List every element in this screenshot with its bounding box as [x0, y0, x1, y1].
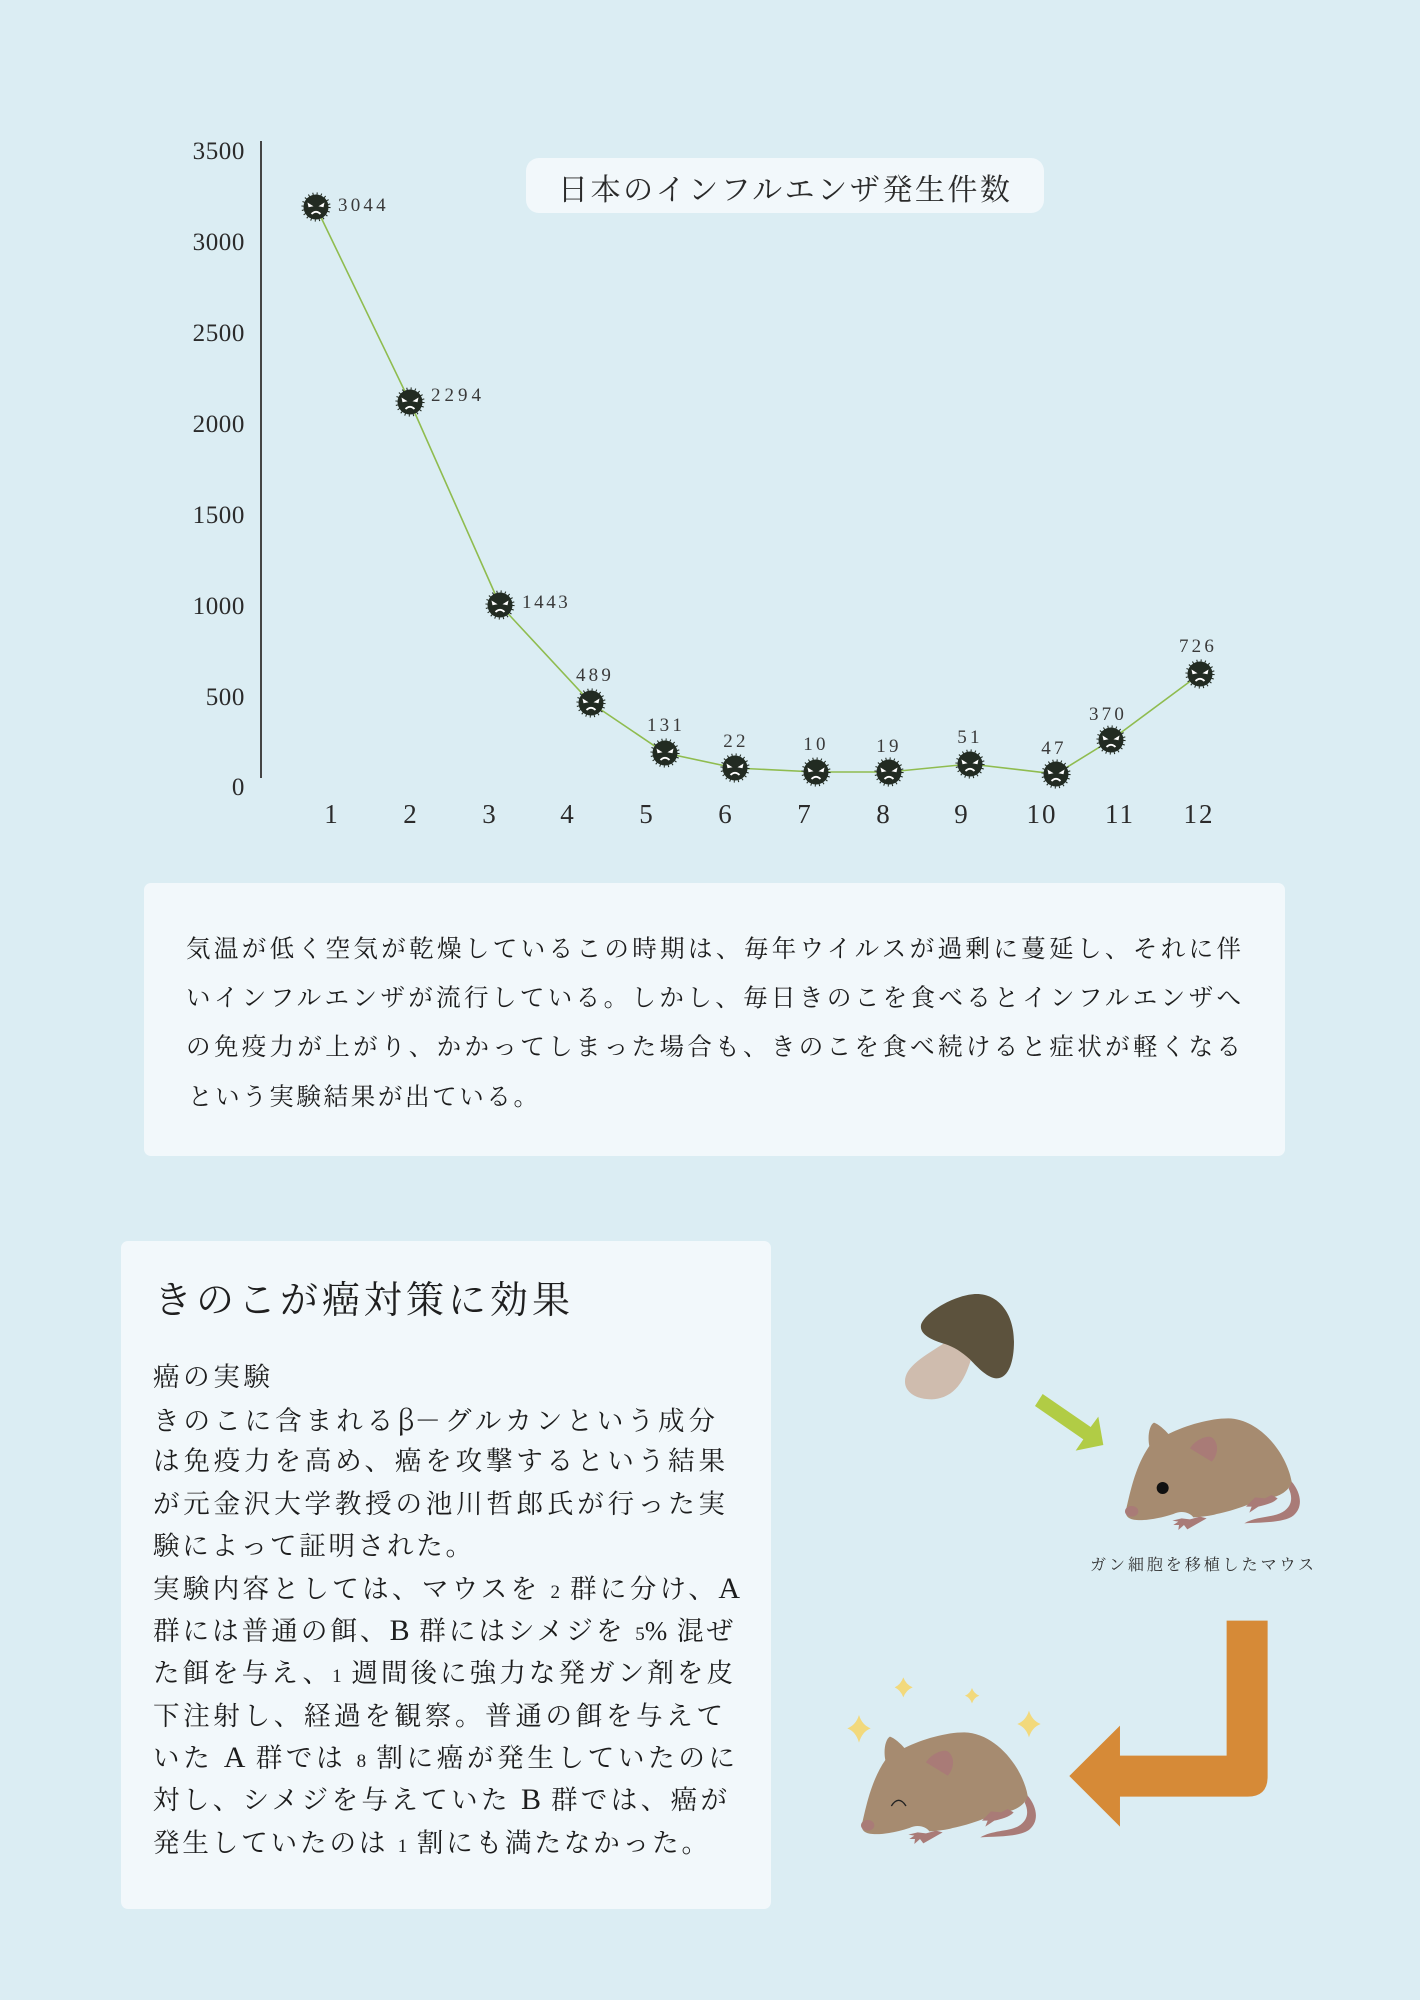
experiment text: いた A 群では 8 割に癌が発生していたのに [153, 1740, 735, 1774]
data value labels: 370 [1089, 704, 1127, 725]
x axis labels [324, 799, 1214, 829]
y axis labels: 3500 [193, 138, 245, 165]
chart: monthly influenza cases [193, 138, 1217, 829]
icon: mushroom [905, 1294, 1014, 1399]
experiment text: 群には普通の餌、B 群にはシメジを 5% 混ぜ [153, 1614, 733, 1646]
experiment text: 実験内容としては、マウスを 2 群に分け、A [153, 1572, 740, 1604]
data value labels: 19 [876, 736, 902, 757]
y axis line [260, 141, 262, 778]
x axis labels: 2 [403, 799, 419, 829]
x axis labels: 10 [1026, 799, 1058, 829]
y axis labels: 1000 [193, 593, 245, 620]
data value labels: 47 [1041, 738, 1067, 759]
chart title: 日本のインフルエンザ発生件数 [558, 174, 1010, 207]
y axis labels: 2000 [193, 411, 245, 438]
y axis labels: 0 [232, 774, 245, 801]
x axis labels: 1 [324, 799, 340, 829]
experiment text: た餌を与え、1 週間後に強力な発ガン剤を皮 [153, 1658, 733, 1688]
panel: influenza explanation: の免疫力が上がり、かかってしまった場合も、きのこを食べ続けると症状が軽くなる [186, 1034, 1241, 1061]
x axis labels: 8 [876, 799, 892, 829]
virus markers [303, 194, 1213, 787]
y axis labels: 500 [206, 684, 245, 711]
data value labels: 2294 [431, 385, 485, 406]
icon: healthy mouse [861, 1732, 1036, 1844]
panel: mushrooms and cancer [121, 1241, 771, 1909]
y axis labels [193, 138, 245, 801]
data value labels: 726 [1179, 636, 1217, 657]
x axis labels: 7 [797, 799, 813, 829]
data value labels [338, 195, 1217, 759]
y axis labels: 2500 [193, 320, 245, 347]
x axis labels: 6 [718, 799, 734, 829]
caption: mouse transplanted with cancer cells: ガン細胞を移植したマウス [1090, 1557, 1314, 1574]
experiment text: きのこに含まれるβ－グルカンという成分 [153, 1398, 715, 1438]
data value labels: 51 [957, 727, 983, 748]
experiment text: が元金沢大学教授の池川哲郎氏が行った実 [153, 1488, 725, 1518]
data line [316, 207, 1200, 774]
data value labels: 22 [723, 731, 749, 752]
panel: influenza explanation: という実験結果が出ている。 [188, 1084, 538, 1111]
data value labels: 10 [803, 734, 829, 755]
panel heading: きのこが癌対策に効果 [154, 1280, 570, 1322]
x axis labels: 11 [1105, 799, 1135, 829]
experiment text: 験によって証明された。 [153, 1530, 472, 1560]
experiment text: は免疫力を高め、癌を攻撃するという結果 [153, 1446, 725, 1476]
data value labels: 1443 [522, 592, 570, 613]
experiment text: 癌の実験 [153, 1362, 270, 1392]
panel: influenza explanation: いインフルエンザが流行している。しかし、毎日きのこを食べるとインフルエンザへ [186, 985, 1241, 1012]
arrow: green [1035, 1394, 1103, 1451]
data value labels: 3044 [338, 195, 389, 216]
chart title [526, 158, 1044, 213]
x axis labels: 9 [954, 799, 970, 829]
icon: sparkles [847, 1677, 1041, 1743]
panel: influenza explanation: 気温が低く空気が乾燥しているこの時期は、毎年ウイルスが過剰に蔓延し、それに伴 [186, 936, 1241, 963]
panel: influenza explanation [144, 883, 1285, 1156]
experiment text: 対し、シメジを与えていた B 群では、癌が [153, 1782, 727, 1816]
data value labels: 489 [576, 665, 614, 686]
y axis labels: 3000 [193, 229, 245, 256]
x axis labels: 5 [639, 799, 655, 829]
y axis labels: 1500 [193, 502, 245, 529]
icon: mouse with cancer cells [1125, 1418, 1300, 1530]
experiment text: 下注射し、経過を観察。普通の餌を与えて [153, 1700, 723, 1730]
x axis labels: 12 [1184, 799, 1214, 829]
arrow: orange [1069, 1621, 1268, 1827]
experiment text [153, 1362, 740, 1858]
experiment text: 発生していたのは 1 割にも満たなかった。 [153, 1828, 708, 1858]
data value labels: 131 [647, 715, 685, 736]
x axis labels: 4 [560, 799, 576, 829]
x axis labels: 3 [482, 799, 498, 829]
